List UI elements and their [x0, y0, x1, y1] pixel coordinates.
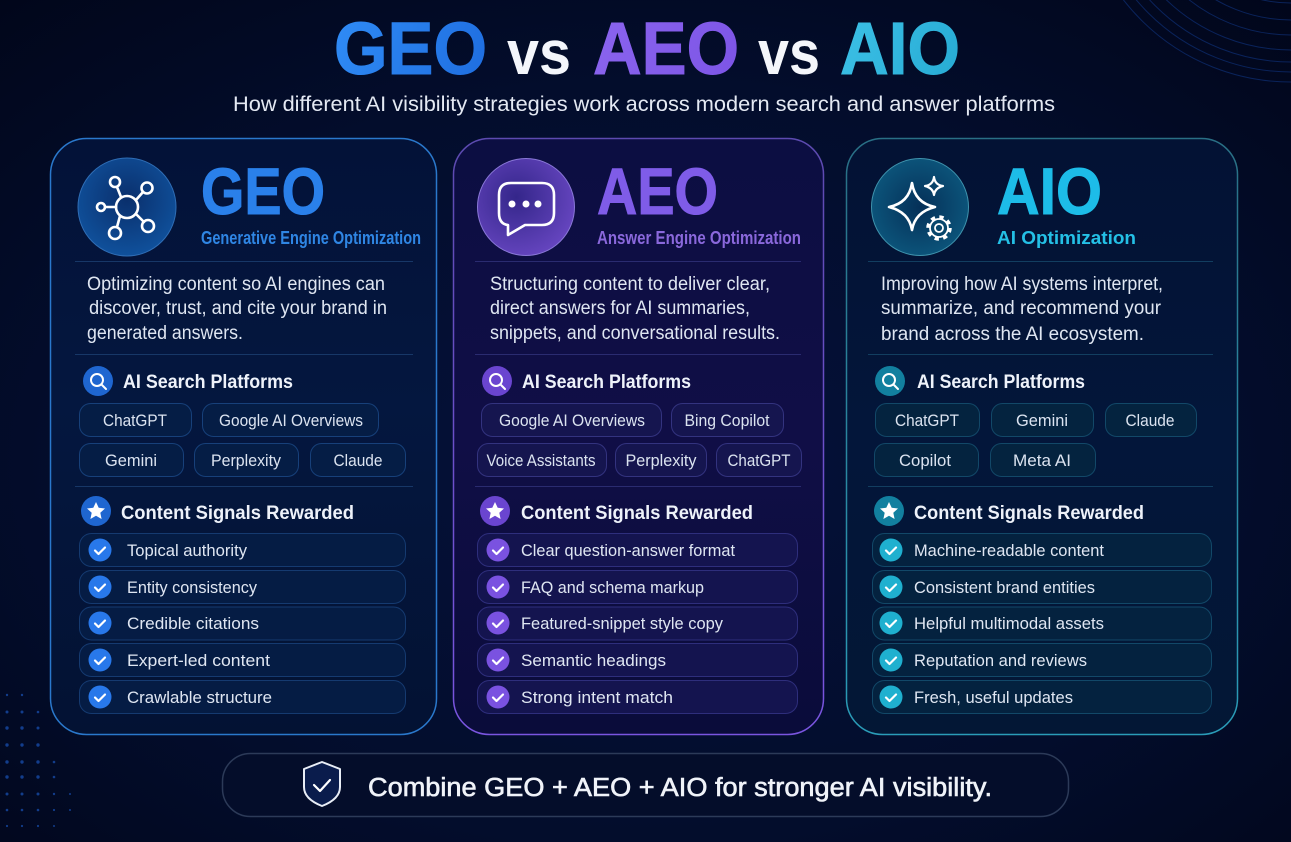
platform names: ChatGPT — [103, 412, 167, 430]
platform chips — [478, 404, 802, 476]
icon: shield check — [304, 762, 340, 806]
title: GEO — [334, 7, 487, 90]
signal labels — [914, 542, 1104, 707]
panel: GEO — [50, 138, 436, 734]
callout pill — [222, 754, 1068, 816]
platform names: ChatGPT — [895, 412, 959, 430]
signal labels: Clear question-answer format — [521, 542, 735, 560]
AEO description: direct answers for AI summaries, — [490, 298, 750, 319]
platform names — [103, 412, 382, 470]
title — [334, 7, 960, 90]
AEO full name: Answer Engine Optimization — [597, 228, 801, 248]
signal labels: Strong intent match — [521, 689, 673, 707]
icon: star — [480, 496, 510, 526]
GEO description — [87, 274, 387, 344]
platform names: Google AI Overviews — [219, 412, 363, 430]
signal labels: Consistent brand entities — [914, 579, 1095, 597]
AIO description: brand across the AI ecosystem. — [881, 324, 1144, 345]
GEO heading: GEO — [201, 154, 325, 228]
callout: combine — [222, 754, 1068, 816]
platform names: Perplexity — [211, 452, 282, 470]
platform names: ChatGPT — [728, 452, 790, 470]
platform names: Copilot — [899, 452, 951, 470]
icon: chat bubble — [478, 158, 574, 256]
AEO description: Structuring content to deliver clear, — [490, 274, 770, 295]
GEO description: discover, trust, and cite your brand in — [89, 298, 387, 319]
AIO description: summarize, and recommend your — [881, 298, 1162, 319]
panel: AEO — [454, 138, 824, 734]
title: vs — [758, 19, 820, 88]
signal labels: Machine-readable content — [914, 542, 1104, 560]
check icons — [88, 538, 112, 708]
GEO card — [50, 138, 436, 734]
check icons — [486, 538, 510, 708]
platform chips — [80, 404, 406, 476]
platform names: Gemini — [1016, 412, 1068, 430]
icon: sparkles and gear — [872, 158, 968, 256]
platform names: Claude — [1126, 412, 1174, 430]
signal rows — [872, 534, 1212, 714]
panel: AIO — [846, 138, 1238, 734]
platform names — [486, 412, 790, 470]
icon: star — [81, 496, 111, 526]
platforms heading: AI Search Platforms — [917, 371, 1085, 393]
platform names: Gemini — [105, 452, 157, 470]
platform chips — [874, 404, 1196, 476]
signal labels: FAQ and schema markup — [521, 579, 704, 597]
signal labels: Entity consistency — [127, 579, 258, 597]
signal labels — [127, 542, 272, 707]
platforms heading: AI Search Platforms — [123, 371, 293, 393]
icon: search — [482, 366, 512, 396]
signals heading: Content Signals Rewarded — [121, 502, 354, 524]
AIO full name: AI Optimization — [997, 228, 1136, 248]
signal labels: Fresh, useful updates — [914, 689, 1073, 707]
AIO description — [881, 274, 1163, 345]
decorative dot grid — [5, 694, 71, 827]
title: vs — [507, 19, 571, 88]
platforms heading: AI Search Platforms — [522, 371, 691, 393]
AIO card — [846, 138, 1238, 734]
signals heading: Content Signals Rewarded — [914, 502, 1144, 524]
GEO description: generated answers. — [87, 323, 243, 344]
subtitle: How different AI visibility strategies work across modern search and answer platforms — [233, 92, 1055, 116]
signal rows — [80, 534, 406, 714]
AEO description: snippets, and conversational results. — [490, 323, 780, 344]
signal labels — [521, 542, 735, 707]
AEO description — [490, 274, 780, 344]
title: AIO — [840, 7, 960, 90]
signal labels: Reputation and reviews — [914, 652, 1087, 670]
platform names: Perplexity — [626, 452, 697, 470]
platform names: Meta AI — [1013, 452, 1071, 470]
signal labels: Crawlable structure — [127, 689, 272, 707]
title: AEO — [593, 7, 739, 90]
signal labels: Credible citations — [127, 615, 259, 633]
platform names — [895, 412, 1174, 470]
platform names: Bing Copilot — [684, 412, 770, 430]
callout text: Combine GEO + AEO + AIO for stronger AI visibility. — [368, 774, 992, 802]
signal labels: Helpful multimodal assets — [914, 615, 1104, 633]
check icons — [880, 538, 902, 708]
signals heading: Content Signals Rewarded — [521, 502, 753, 524]
icon: network nodes — [78, 158, 176, 256]
AIO heading: AIO — [997, 154, 1102, 228]
GEO full name: Generative Engine Optimization — [201, 228, 421, 248]
platform names: Voice Assistants — [486, 452, 596, 470]
icon: search — [83, 366, 113, 396]
AIO description: Improving how AI systems interpret, — [881, 274, 1163, 295]
GEO description: Optimizing content so AI engines can — [87, 274, 385, 295]
signal labels: Expert-led content — [127, 652, 270, 670]
icon: search — [875, 366, 905, 396]
platform names: Claude — [334, 452, 382, 470]
signal labels: Semantic headings — [521, 652, 666, 670]
decorative corner arcs — [1079, 0, 1291, 82]
signal labels: Topical authority — [127, 542, 248, 560]
icon: star — [874, 496, 904, 526]
AEO heading: AEO — [597, 154, 718, 228]
AEO card — [454, 138, 824, 734]
signal labels: Featured-snippet style copy — [521, 615, 724, 633]
signal rows — [478, 534, 798, 714]
platform names: Google AI Overviews — [499, 412, 645, 430]
